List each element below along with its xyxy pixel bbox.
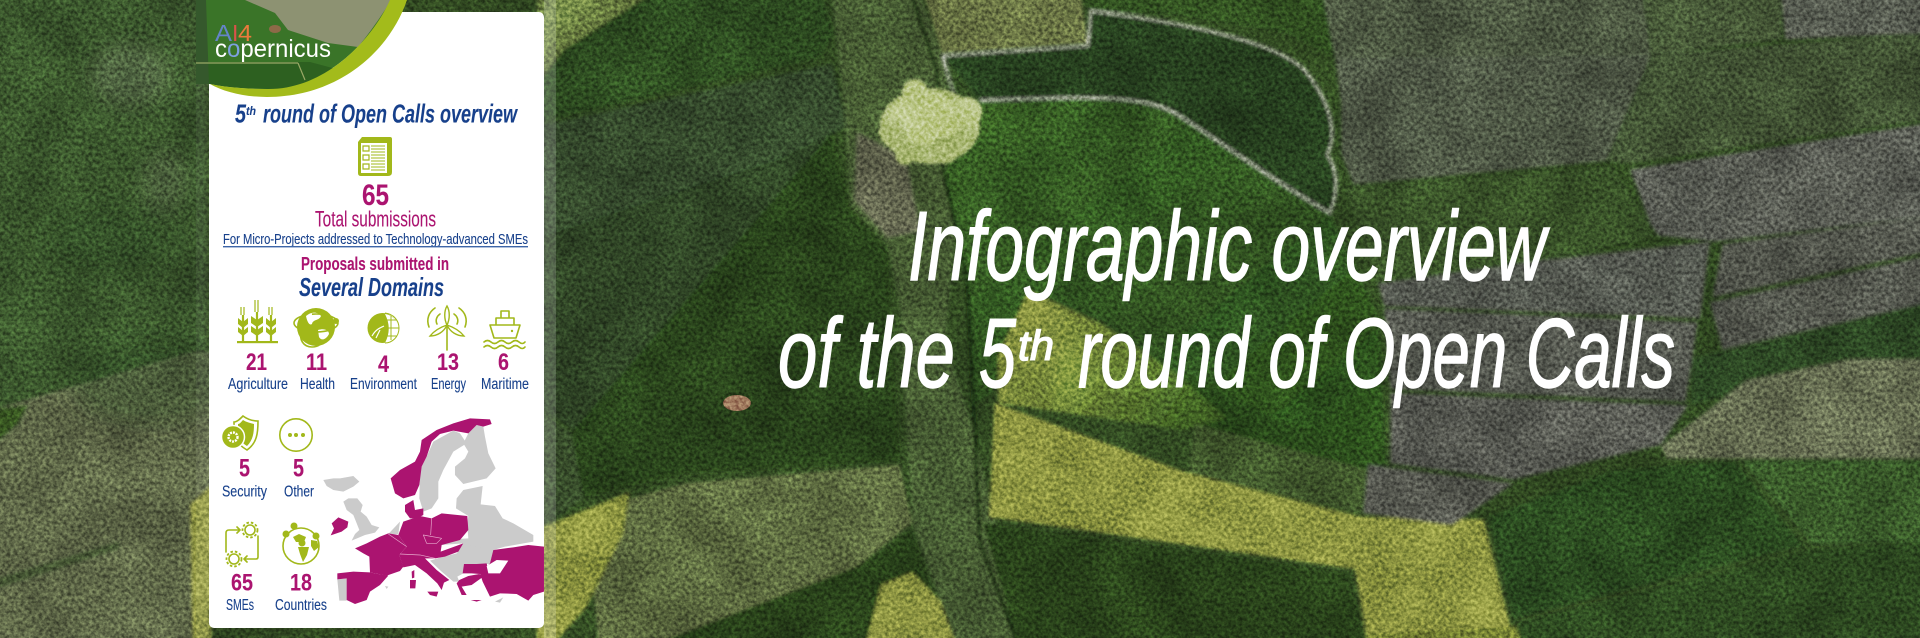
- heading: proposals submitted in several domains: [299, 254, 449, 302]
- stats: SMEs and countries: SMEs: [226, 597, 254, 614]
- stats: SMEs and countries: 65: [231, 570, 253, 597]
- stats: domain counts: 11: [306, 349, 327, 376]
- labels: domain names: Agriculture: [228, 376, 288, 393]
- translucent strip behind card: [196, 0, 556, 638]
- tree: [879, 79, 982, 165]
- subheading: micro-projects: For Micro-Projects addressed to Technology-advanced SMEs: [223, 232, 528, 248]
- stat: 65 total submissions: [315, 179, 436, 232]
- logo: AI4 Copernicus: A: [215, 20, 233, 46]
- stats: security and other: 5: [239, 455, 250, 483]
- middle fields: [537, 0, 648, 83]
- icon: maritime ship: [484, 311, 525, 348]
- icon: energy wind turbine: [428, 306, 466, 350]
- heading: 5th round of Open Calls overview: 5: [235, 99, 246, 129]
- icon: environment globe: [368, 313, 399, 343]
- header photo cut-out: [196, 0, 391, 89]
- stats: SMEs and countries: 18: [290, 570, 312, 597]
- heading: 5th round of Open Calls overview: th: [246, 104, 256, 118]
- logo: AI4 Copernicus: I: [232, 20, 238, 46]
- stat: 65 total submissions: 65: [362, 179, 389, 212]
- heading: 5th round of Open Calls overview: round of Open Calls overview: [263, 99, 518, 129]
- heading: proposals submitted in several domains: Proposals submitted in: [301, 254, 449, 274]
- icon: checklist: [358, 137, 392, 176]
- labels: domain names: Maritime: [481, 376, 529, 393]
- main title: infographic overview of the 5th round of open calls: [778, 191, 1675, 408]
- stats: security and other: Security: [222, 484, 267, 501]
- icon: security shield: [222, 416, 258, 450]
- icon: health globe: [294, 308, 339, 347]
- icon: agriculture wheat: [237, 300, 278, 343]
- stats: domain counts: 21: [246, 349, 267, 376]
- heading: proposals submitted in several domains: Several Domains: [299, 274, 444, 302]
- logo: AI4 Copernicus: [215, 20, 331, 63]
- icon: SMEs gears and arrows: [226, 522, 258, 566]
- logo: AI4 Copernicus: copernicus: [215, 35, 331, 63]
- icon: countries globe with pins: [282, 522, 320, 564]
- heading: 5th round of Open Calls overview: [235, 99, 518, 129]
- mound: [723, 395, 751, 411]
- main title: infographic overview of the 5th round of open calls: Infographic overview: [908, 191, 1550, 301]
- main title: infographic overview of the 5th round of open calls: th: [1018, 322, 1054, 369]
- stats: domain counts: 4: [378, 351, 390, 378]
- stats: SMEs and countries: [226, 570, 327, 614]
- stats: domain counts: 13: [437, 349, 459, 376]
- stats: domain counts: 6: [498, 349, 509, 376]
- labels: domain names: [228, 376, 529, 393]
- labels: domain names: Health: [300, 376, 335, 393]
- main title: infographic overview of the 5th round of open calls: of the: [778, 298, 955, 408]
- curved green band: [210, 0, 407, 97]
- stats: SMEs and countries: Countries: [275, 597, 327, 614]
- panel: overview card: [196, 0, 544, 628]
- stats: security and other: [222, 455, 315, 501]
- paths and stream: [912, 0, 1017, 638]
- map: Europe with participating countries: [323, 418, 544, 604]
- main title: infographic overview of the 5th round of open calls: 5: [979, 298, 1016, 408]
- right fields: [1323, 0, 1651, 58]
- left fields: [0, 0, 205, 411]
- stats: domain counts: [246, 349, 509, 378]
- labels: domain names: Energy: [431, 376, 466, 393]
- logo: AI4 Copernicus: 4: [238, 20, 252, 46]
- stat: 65 total submissions: Total submissions: [315, 207, 436, 232]
- labels: domain names: Environment: [350, 376, 417, 393]
- stats: security and other: 5: [293, 455, 304, 483]
- centre fields: [924, 0, 1088, 53]
- icon: other dots: [280, 419, 312, 451]
- stats: security and other: Other: [284, 484, 315, 501]
